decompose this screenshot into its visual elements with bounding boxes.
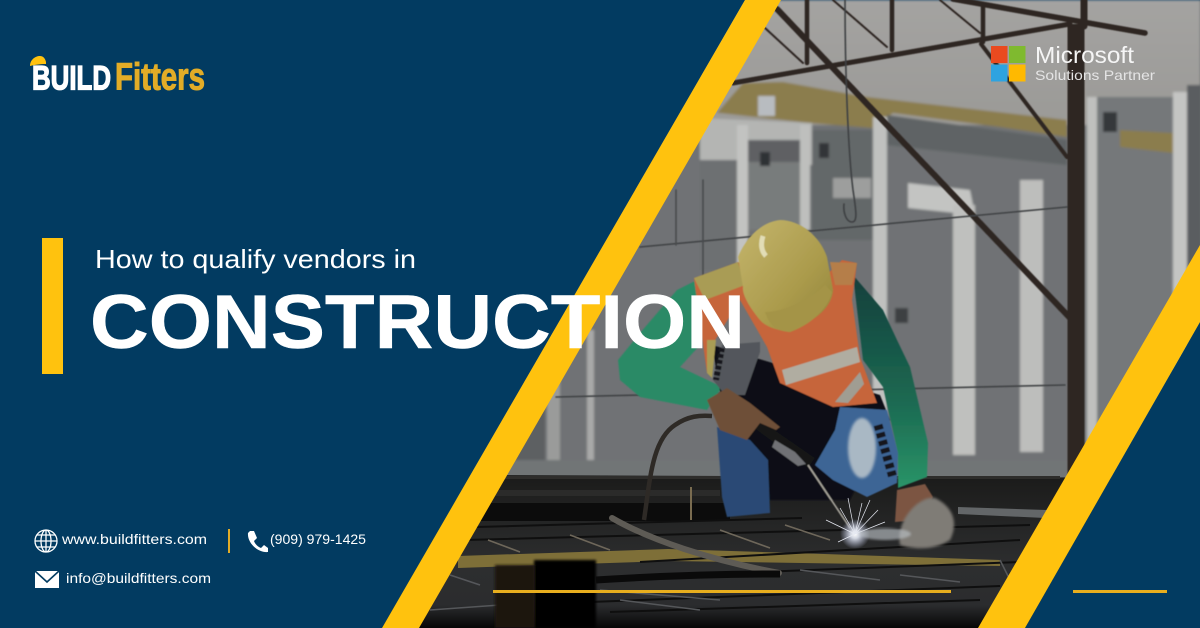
left sleeve <box>618 280 722 410</box>
navy bottom right corner <box>1025 322 1200 628</box>
photo background: factory wall <box>380 0 1200 500</box>
badge subtitle: Solutions Partner <box>1035 67 1155 83</box>
icon: globe <box>35 530 57 552</box>
right hand <box>895 484 933 522</box>
badge name: Microsoft <box>1035 42 1134 68</box>
subtitle: How to qualify vendors in <box>95 244 416 274</box>
icon: phone <box>248 531 268 552</box>
phone number: (909) 979-1425 <box>270 531 366 547</box>
yellow line on photo <box>493 590 951 593</box>
cloth <box>899 498 954 548</box>
email: info@buildfitters.com <box>66 570 211 586</box>
icon: Microsoft squares <box>991 46 1026 82</box>
small vertical rebar <box>690 487 692 520</box>
knee pad on thigh <box>713 342 760 395</box>
dark torso <box>712 345 890 500</box>
divider <box>228 529 230 553</box>
yellow line on corner <box>1073 590 1167 593</box>
logo wordmark Fitters: Fitters <box>115 56 205 98</box>
thick hose <box>612 518 779 573</box>
yellow diagonal band <box>382 0 781 628</box>
welding torch <box>750 420 815 468</box>
hard hat <box>738 220 833 332</box>
vest <box>694 260 877 407</box>
logo hard hat icon <box>30 56 46 66</box>
steel truss beams <box>556 0 1145 478</box>
worker <box>618 220 954 548</box>
floor with rebar mesh <box>380 475 1200 628</box>
welding spark <box>826 498 911 549</box>
electrode <box>808 465 850 528</box>
welding cable <box>644 416 712 520</box>
main title: CONSTRUCTION <box>90 280 745 365</box>
yellow beam <box>458 549 1000 568</box>
yellow right diagonal band <box>978 245 1200 628</box>
website: www.buildfitters.com <box>61 531 207 547</box>
foreground dark blob <box>534 560 596 628</box>
icon: envelope <box>35 571 59 588</box>
logo: BuildFitters <box>30 56 205 98</box>
contact details <box>35 529 366 588</box>
right sleeve <box>853 275 928 488</box>
navy left panel <box>0 0 745 628</box>
reflective stripe <box>782 347 860 385</box>
left hand <box>707 388 780 440</box>
jeans <box>717 427 770 517</box>
Microsoft Solutions Partner badge <box>991 42 1155 83</box>
photo: welder at construction site <box>380 0 1200 628</box>
title accent bar <box>42 238 63 374</box>
logo wordmark BUILD: BUILD <box>32 60 111 98</box>
